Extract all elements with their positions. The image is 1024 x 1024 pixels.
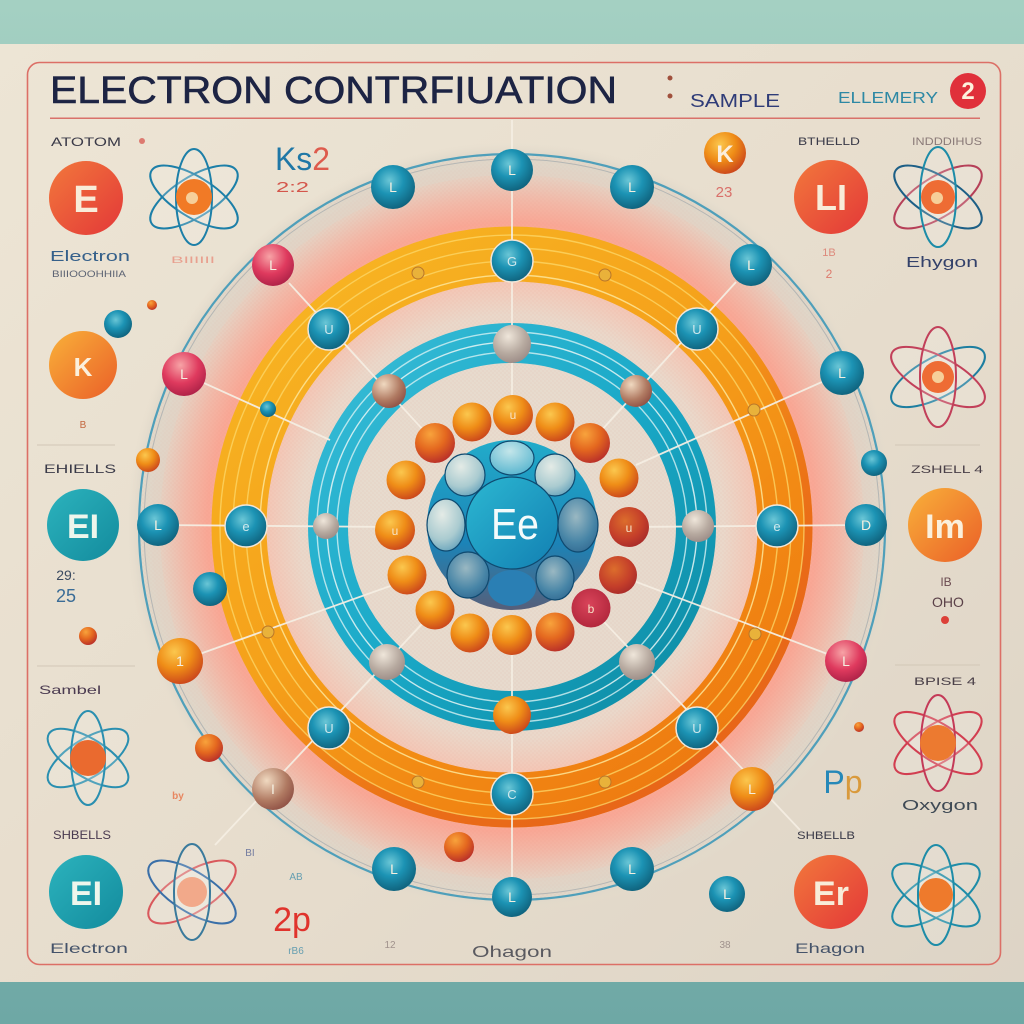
label: shells top-right: BTHELLD [798,136,860,148]
inner electron ring: u [510,408,516,422]
panel: top-left atom card: Electron [50,248,130,265]
faint margin notes: 38 [719,940,731,951]
panel: sample atom left [39,683,137,805]
panel: K element: B [80,420,87,431]
panel: Im element: IB [940,575,952,589]
panel: Im element: ZSHELL 4 [911,464,983,476]
panel: bottom-left E1: SHBELLS [53,828,111,842]
outer shell electrons: L [842,653,850,669]
panel: top-left atom card: E [73,179,99,221]
cyan ring electrons [313,325,714,734]
header: shell number badge [950,73,986,109]
outer shell electrons: L [628,861,636,877]
panel: right lower atom [886,676,990,814]
panel: shells El: EI [67,508,99,546]
stray small electrons [79,300,949,862]
header: shell number badge: 2 [961,78,975,105]
panel: shells El: 25 [56,586,76,606]
badge: K element: K [716,141,734,168]
panel: shells El: EHIELLS [44,462,116,476]
title: ELECTRON CONTRFIUATION [50,70,617,112]
icon: atom red bottom-left [139,844,245,940]
panel: shells El [44,462,119,606]
panel: Li element: 2 [826,267,833,281]
icon: atom mid-right [883,327,993,427]
outer shell electrons: L [748,781,756,797]
nucleus label: Ee [491,500,539,549]
faint margin notes: by [172,791,184,802]
outer shell electrons: L [723,886,731,902]
faint margin notes [172,791,731,957]
outer shell electrons: D [861,517,871,533]
panel: Er element [794,830,868,956]
header rule [50,118,980,119]
panel: Er element: Er [813,875,849,913]
label: shells top-right [798,136,982,148]
outer shell electrons: L [389,179,397,195]
small ring nodes [262,267,761,788]
icon: atom teal top-left [141,149,247,245]
header: sample element label [668,76,938,111]
outer shell electrons: L [269,257,277,273]
outer shell electrons: L [838,365,846,381]
orange ring electrons [225,240,798,815]
panel: right lower atom: BPISE 4 [914,676,976,688]
orange ring electrons: e [242,519,250,534]
panel: Er element: Ehagon [795,940,865,956]
inner electron ring: b [588,602,595,616]
orange ring electrons: U [692,322,702,337]
orange shell ring [216,231,808,823]
text: Ehygon: Ehygon [906,254,978,271]
icon: atom teal bottom-right [883,845,989,945]
panel: Im element: OHO [932,594,964,610]
icon: atom top-right [885,147,991,247]
badge: K element [704,132,746,201]
nucleus [427,440,598,610]
text: Ks2 formula: 2:2 [276,179,309,196]
glow background [127,142,897,912]
panel: bottom-left E1 [49,828,128,956]
faint margin notes: 12 [384,940,396,951]
outer shell electrons: L [180,366,188,382]
outer shell electrons: L [508,889,516,905]
cyan shell ring [317,332,707,722]
header: sample element label: SAMPLE [690,91,780,111]
faint margin notes: BI [245,848,255,859]
label: shells top-right: INDDDIHUS [912,136,982,148]
inner electron ring [375,395,649,655]
text: 2p: 2p [273,901,311,939]
panel: top-left atom card: BIIIOOOHHIIA [52,269,126,279]
faint margin notes: AB [289,872,303,883]
atom diagram [79,120,949,917]
panel: shells El: 29: [56,567,76,583]
orange ring electrons: U [324,322,334,337]
panel: sample atom left: Sambel [39,683,101,697]
panel: Im element: Im [925,508,965,546]
panel: top-left atom card: ATOTOM [51,135,121,149]
panel: right lower atom: Oxygon [902,797,978,814]
orange ring electrons: C [507,787,517,802]
panel: bottom-left E1: Electron [50,940,128,956]
connector spokes [158,120,866,880]
text: Ohagon: Ohagon [472,944,552,961]
outer thin shell [139,154,885,900]
badge: K element: 23 [716,184,732,201]
panel: Li element: 1B [822,247,836,259]
header: sample element label: ELLEMERY [838,90,938,107]
outer shell electrons: L [628,179,636,195]
panel: K element: K [74,352,93,382]
orange ring electrons: G [507,254,517,269]
text: Pp: Pp [823,764,863,800]
inner electron ring: u [392,524,398,538]
nucleus label [466,477,558,569]
orange ring electrons: U [324,721,334,736]
panel: Li element [794,160,868,281]
outer shell electrons: 1 [176,653,184,669]
text: Ks2 formula: Ks2 [275,141,330,177]
orange ring electrons: e [773,519,781,534]
outer shell electrons: L [508,162,516,178]
outer shell electrons: I [271,781,275,797]
panel: Im element [908,464,983,610]
panel: K element [49,331,117,431]
panel: bottom-left E1: EI [70,875,102,913]
inner electron ring: u [626,521,632,535]
faint margin notes: rB6 [288,946,304,957]
text: Ks2 formula [275,141,330,196]
orange ring electrons: U [692,721,702,736]
outer shell electrons: L [747,257,755,273]
panel: Er element: SHBELLB [797,830,855,842]
outer shell electrons: L [390,861,398,877]
panel: top-left atom card [49,135,145,279]
note under atom: BIIIIII [171,255,215,265]
panel: Li element: LI [815,177,847,218]
outer shell electrons: L [154,517,162,533]
outer shell electrons [137,149,887,917]
